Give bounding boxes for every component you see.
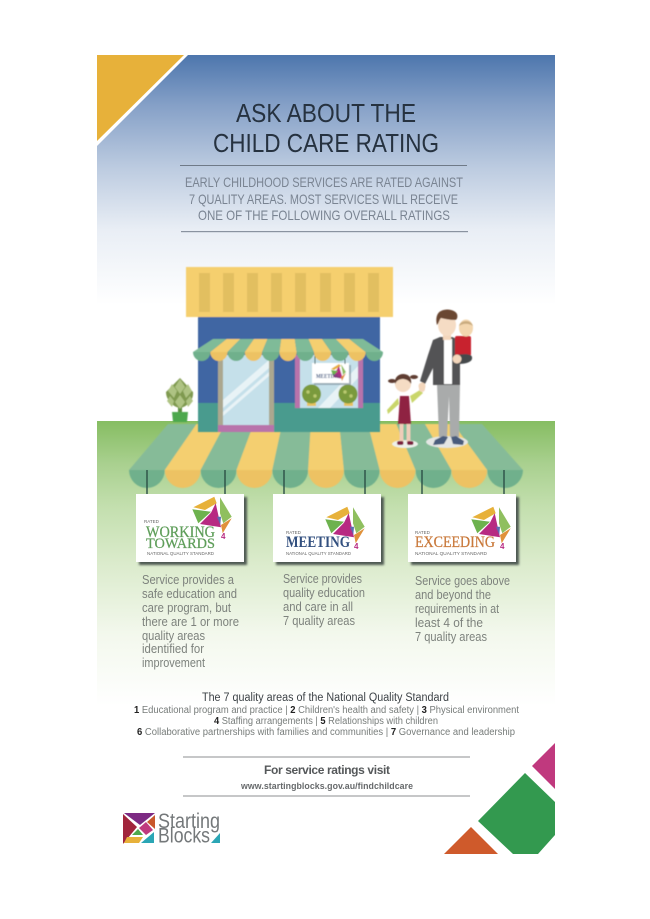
illustration: girl — [387, 374, 425, 448]
quality areas list — [134, 692, 519, 738]
jacket — [420, 337, 460, 385]
description: working towards: quality areas — [142, 629, 205, 643]
description: exceeding: requirements in at — [415, 602, 499, 616]
description: meeting: and care in all — [283, 600, 353, 614]
rating sign: exceeding: RATED — [415, 530, 431, 535]
quality areas list: The 7 quality areas of the National Quality Standard — [202, 692, 449, 704]
icon: NQS logo: 4 — [221, 532, 226, 541]
description: working towards: care program, but — [142, 601, 231, 615]
description: working towards: identified for — [142, 642, 204, 656]
pavement awning: striped canopy — [129, 424, 523, 488]
description: working towards — [142, 573, 239, 670]
quality areas list: 6 Collaborative partnerships with families and communities | 7 Governance and leadership — [137, 727, 516, 738]
window rating sign — [312, 355, 351, 385]
shoes — [397, 441, 404, 445]
legs — [400, 424, 404, 442]
subtitle with rules — [180, 165, 468, 232]
shop front awning — [193, 339, 383, 361]
rating sign: exceeding: NATIONAL QUALITY STANDARD — [415, 551, 488, 556]
icon: NQS logo: 4 — [354, 542, 359, 551]
description: exceeding: least 4 of the — [415, 616, 483, 630]
shop door — [218, 355, 274, 432]
logo: Starting Blocks: Starting — [158, 810, 220, 833]
window rating sign: MEETING — [316, 373, 340, 380]
description: working towards: there are 1 or more — [142, 615, 239, 629]
description: working towards: improvement — [142, 656, 205, 670]
description: meeting: Service provides — [283, 572, 362, 586]
description: exceeding: 7 quality areas — [415, 630, 487, 644]
quality areas list: 1 Educational program and practice | 2 Children's health and safety | 3 Physical environment — [134, 705, 519, 716]
rating sign: meeting — [273, 494, 384, 565]
logo: Starting Blocks: Blocks — [158, 824, 210, 848]
rating sign: working towards: NATIONAL QUALITY STANDARD — [147, 551, 215, 556]
baby — [452, 320, 473, 364]
rating sign: meeting: NATIONAL QUALITY STANDARD — [286, 551, 352, 556]
description: meeting: quality education — [283, 586, 365, 600]
corner shape: magenta triangle — [532, 743, 555, 789]
awning hanger lines — [147, 470, 504, 500]
corner shape: green hexagon — [478, 773, 555, 854]
service ratings call to action — [183, 756, 470, 796]
poster background — [97, 55, 555, 855]
title: ASK ABOUT THE — [236, 100, 416, 128]
shop sign board — [186, 267, 393, 317]
description: exceeding — [415, 574, 510, 644]
shop building — [186, 267, 393, 432]
icon: NQS logo: 4 — [500, 542, 505, 551]
icon: potted plant — [166, 378, 193, 422]
shoes — [433, 436, 448, 445]
head — [395, 376, 411, 392]
description: exceeding: and beyond the — [415, 588, 491, 602]
neck and head — [443, 332, 451, 340]
title — [213, 100, 439, 158]
sleeves — [387, 398, 399, 414]
father's hand — [418, 382, 426, 390]
shirt — [444, 339, 452, 384]
shop window — [295, 355, 363, 408]
title: CHILD CARE RATING — [213, 130, 439, 158]
corner triangle: yellow — [97, 55, 188, 146]
rating sign: meeting: MEETING — [286, 534, 350, 551]
rating sign: working towards: RATED — [144, 519, 160, 524]
rating sign: working towards: TOWARDS — [146, 536, 215, 552]
quality areas list: 4 Staffing arrangements | 5 Relationships with children — [214, 716, 438, 727]
rating sign: exceeding — [408, 494, 519, 565]
service ratings call to action: For service ratings visit — [264, 763, 390, 777]
description: meeting — [283, 572, 365, 628]
subtitle with rules: ONE OF THE FOLLOWING OVERALL RATINGS — [198, 207, 450, 223]
rating sign: exceeding: EXCEEDING — [415, 534, 495, 551]
dress — [398, 396, 411, 424]
trousers — [437, 384, 460, 437]
service ratings call to action: www.startingblocks.gov.au/findchildcare — [240, 781, 413, 791]
subtitle with rules: 7 QUALITY AREAS. MOST SERVICES WILL RECEIVE — [189, 191, 458, 207]
description: working towards: safe education and — [142, 587, 237, 601]
shop walls — [198, 317, 380, 432]
rating sign: meeting: RATED — [286, 530, 302, 535]
rating sign: working towards — [136, 494, 247, 565]
subtitle with rules: EARLY CHILDHOOD SERVICES ARE RATED AGAINST — [185, 174, 463, 190]
description: working towards: Service provides a — [142, 573, 234, 587]
description: exceeding: Service goes above — [415, 574, 510, 588]
description: meeting: 7 quality areas — [283, 614, 355, 628]
rating sign: working towards: WORKING — [146, 524, 215, 541]
logo: Starting Blocks — [123, 810, 220, 848]
corner shape: orange triangle — [444, 827, 498, 854]
illustration: father holding baby — [418, 310, 473, 448]
